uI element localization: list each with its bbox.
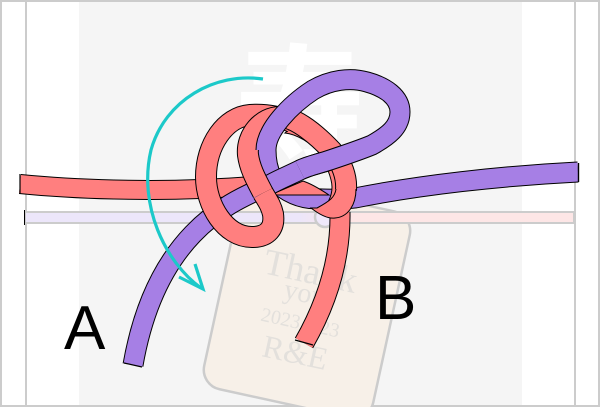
kanji watermark: 寿: [235, 35, 365, 181]
purple upper loop: [266, 80, 400, 150]
tag text: 2023.3.23: [259, 304, 342, 342]
red sliver inside ring: [285, 120, 345, 200]
label A: A: [64, 294, 106, 363]
purple loop arm: [300, 112, 400, 170]
red ring bottom taper: [311, 189, 356, 218]
tag text: you: [281, 274, 329, 313]
purple right strand, lower strand and vertical: [266, 150, 578, 199]
gift tag: [200, 179, 414, 407]
tag text: R&E: [259, 328, 331, 377]
background panel: [79, 0, 522, 407]
tag text: [259, 242, 361, 377]
purple ribbon A strand: [124, 160, 330, 367]
ribbon B tail: [295, 212, 340, 345]
horizontal band: [24, 210, 574, 225]
label B: B: [375, 264, 416, 333]
red ring inner S and right loop: [248, 117, 346, 193]
tag text: Thank: [260, 242, 361, 302]
arrow: teal curved: [148, 78, 263, 289]
red strand wedge: [270, 181, 329, 195]
tag hole: [315, 207, 335, 227]
red ring outer loop: [206, 115, 292, 237]
red strand from left: [20, 174, 278, 194]
